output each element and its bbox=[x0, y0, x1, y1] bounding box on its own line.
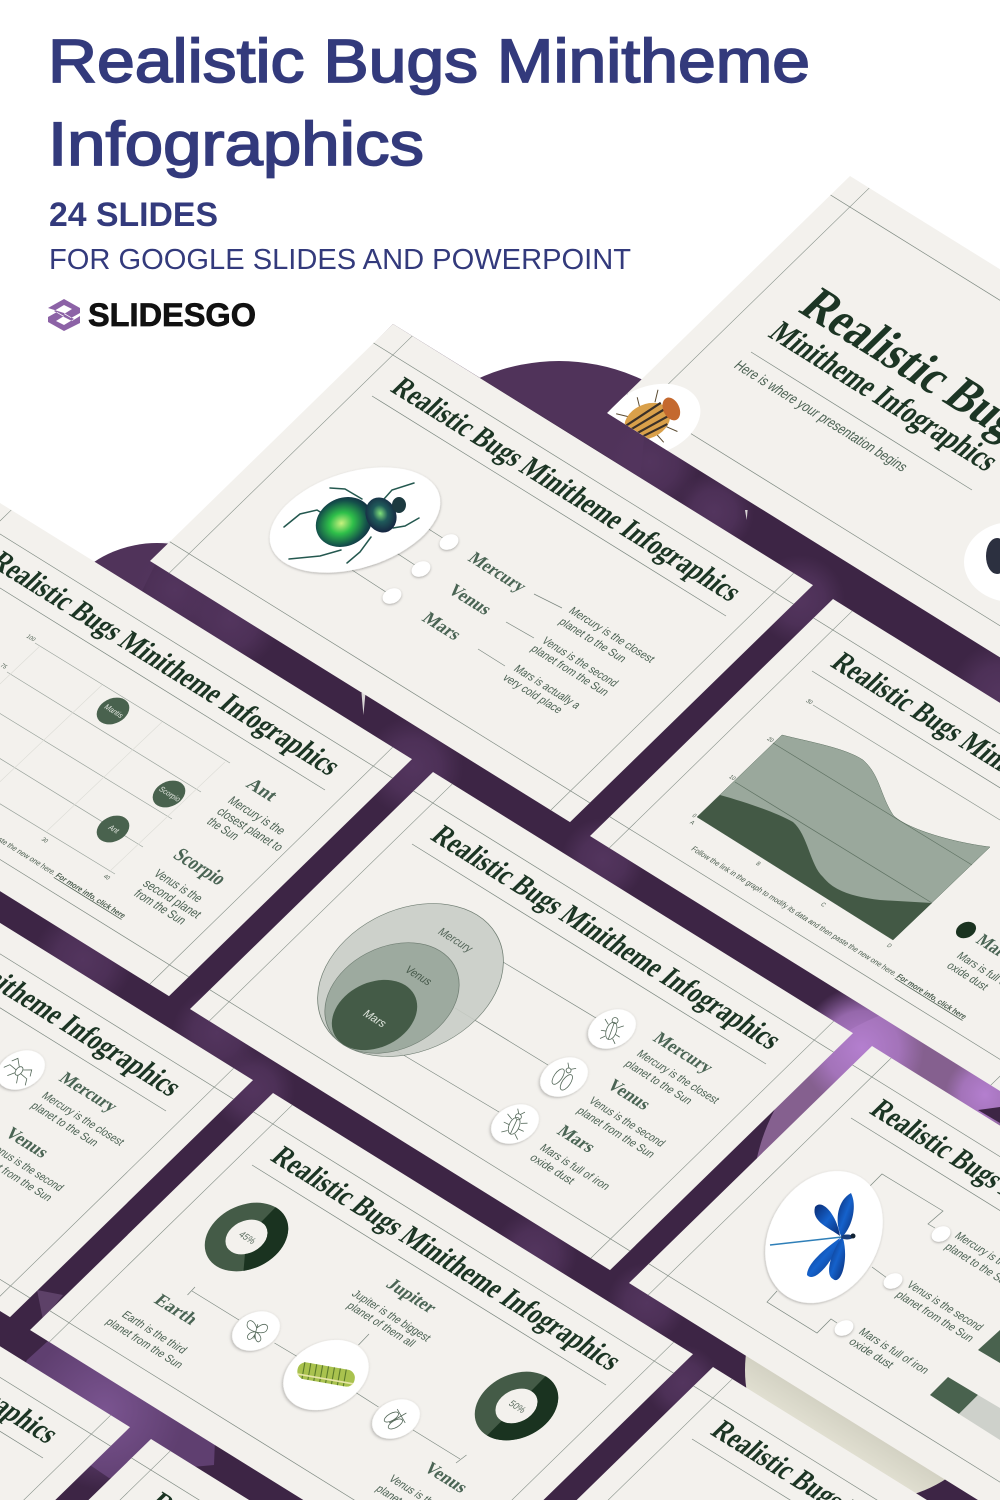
icon: cockroach bbox=[481, 1097, 549, 1151]
connector lines bbox=[188, 1287, 466, 1463]
label: Scorpio bbox=[131, 845, 231, 927]
panel: donut chart slide bbox=[30, 1093, 693, 1500]
label: Earth bbox=[103, 1291, 203, 1371]
marker: Mantis bbox=[90, 693, 136, 729]
donut chart: 50%: 50% bbox=[506, 1399, 528, 1415]
text: Venus description: planet from the Sun bbox=[893, 1289, 976, 1345]
title bbox=[48, 27, 810, 178]
title: Realistic Bugs Minitheme bbox=[48, 27, 810, 95]
title: Infographics bbox=[48, 110, 424, 178]
icon: butterfly bbox=[222, 1304, 290, 1358]
label: Venus: planet from the Sun bbox=[574, 1105, 657, 1161]
label: Mars: Mars bbox=[418, 609, 466, 644]
donut chart: 45% bbox=[202, 1201, 291, 1273]
panel: bottom-centre slide bbox=[0, 1439, 571, 1500]
label: Mars: very cold place bbox=[500, 672, 565, 716]
panel: venn slide bbox=[190, 772, 853, 1270]
label: Venus: Venus bbox=[444, 581, 497, 619]
label: Mercury: planet to the Sun bbox=[556, 616, 629, 665]
label: Mercury: Mercury is the closest bbox=[566, 605, 657, 665]
label: Jupiter: Jupiter is the biggest bbox=[349, 1288, 433, 1344]
label: Ant: Ant bbox=[242, 775, 282, 805]
label: Mars: Mars bbox=[553, 1122, 600, 1156]
slide title: Realistic Bugs Minitheme Infographics bbox=[264, 1141, 629, 1377]
chart footnote: Follow the link in the graph to modify its data and then paste the new one here. For more info, click here bbox=[689, 844, 969, 1021]
panel: bottom-left slide bbox=[0, 1166, 130, 1500]
text: Venus description: Venus is the second bbox=[904, 1279, 986, 1333]
label: Jupiter: planet of them all bbox=[344, 1300, 418, 1350]
label: Mars: Mars is actually a bbox=[511, 663, 584, 712]
label: Jupiter bbox=[344, 1275, 442, 1350]
label: Venus: Venus bbox=[1, 1124, 54, 1162]
label: Mercury: Mercury bbox=[55, 1069, 123, 1116]
subtitle: FOR GOOGLE SLIDES AND POWERPOINT bbox=[49, 244, 631, 276]
label: Earth: Earth bbox=[150, 1291, 203, 1329]
connector lines bbox=[352, 528, 562, 666]
progress bars bbox=[930, 1330, 1000, 1440]
icon: caterpillar bbox=[266, 1327, 386, 1423]
area chart: 20 bbox=[765, 736, 775, 744]
scatter chart: 100 bbox=[24, 634, 36, 643]
donut chart: 50% bbox=[472, 1370, 561, 1442]
label: Mercury bbox=[28, 1069, 127, 1149]
label: Venus bbox=[574, 1076, 668, 1161]
label: Venus bbox=[0, 1124, 66, 1204]
label: Scorpio: Scorpio bbox=[168, 845, 231, 890]
icon: fly bbox=[530, 1050, 598, 1104]
label: Scorpio: from the Sun bbox=[131, 887, 190, 927]
marker: Scorpio: Scorpio bbox=[157, 785, 183, 804]
connector lines bbox=[390, 962, 596, 1112]
panel: dragonfly slide bbox=[629, 1046, 1000, 1500]
label: Earth: Earth is the third bbox=[119, 1309, 189, 1356]
label: Venus bbox=[373, 1459, 473, 1500]
stacked venn diagram: Venus bbox=[402, 964, 435, 988]
label: Venus: Venus bbox=[603, 1076, 656, 1114]
label: Mercury: Mercury is the closest bbox=[634, 1048, 722, 1106]
label: Ant: Mercury is the bbox=[225, 794, 289, 838]
panel: lower-left icon slide bbox=[0, 819, 253, 1317]
label: Ant bbox=[204, 775, 289, 854]
small folded-corner accents bbox=[37, 510, 748, 1320]
icon: spider bbox=[0, 1043, 55, 1097]
label: Mars: Mars is full of iron bbox=[537, 1142, 613, 1193]
area chart: 0 bbox=[690, 813, 697, 819]
label: Mercury: Mercury bbox=[649, 1029, 718, 1077]
area chart: A bbox=[688, 820, 696, 827]
icon: striped potato beetle bbox=[608, 384, 700, 450]
legend: Mars bbox=[944, 919, 1000, 1000]
cream circle behind lower slides bbox=[745, 1240, 1000, 1500]
bullet dots bbox=[831, 1223, 954, 1339]
mauve band bottom left bbox=[0, 1330, 215, 1490]
marker: Scorpio bbox=[146, 776, 192, 812]
area chart bbox=[688, 698, 1000, 950]
label: Venus bbox=[444, 581, 621, 699]
label: Jupiter: Jupiter bbox=[382, 1275, 442, 1317]
panel: cover slide bbox=[593, 176, 1000, 674]
label: Mercury bbox=[622, 1029, 722, 1107]
cover tagline: Here is where your presentation begins bbox=[731, 358, 911, 474]
area chart: B bbox=[754, 861, 762, 868]
label: Mars: oxide dust bbox=[527, 1152, 577, 1187]
marker: Mantis: Mantis bbox=[102, 702, 126, 720]
stacked venn diagram: Mercury bbox=[435, 926, 476, 955]
marker: Ant bbox=[90, 811, 136, 847]
icon: dark beetle bbox=[964, 522, 1000, 602]
marker: Ant: Ant bbox=[106, 823, 122, 836]
label: Venus: Venus bbox=[420, 1459, 473, 1497]
purple backdrop behind slides bbox=[0, 324, 1000, 1500]
label: Earth: planet from the Sun bbox=[103, 1316, 186, 1371]
label: Mercury: planet to the Sun bbox=[622, 1058, 695, 1107]
scatter chart: 40 bbox=[101, 874, 111, 882]
label: Mars bbox=[527, 1122, 613, 1193]
label: Mercury: planet to the Sun bbox=[28, 1100, 101, 1149]
icon: beetle bbox=[578, 1002, 646, 1056]
area chart: C bbox=[819, 902, 827, 909]
slide title: Realistic Bugs Minitheme Infographics bbox=[424, 820, 789, 1056]
icon: blue dragonfly bbox=[741, 1149, 907, 1325]
label: Mars bbox=[418, 609, 584, 716]
text: Mars description: oxide dust bbox=[846, 1336, 896, 1371]
slide count heading: 24 SLIDES bbox=[49, 196, 218, 234]
label: Mercury bbox=[464, 549, 657, 665]
scatter chart bbox=[0, 634, 230, 882]
label: Venus: planet from the Sun bbox=[528, 643, 611, 699]
area chart: D bbox=[885, 943, 893, 950]
panel: area chart slide bbox=[590, 599, 1000, 1097]
label: Scorpio: Venus is the bbox=[151, 867, 206, 905]
icon: mosquito bbox=[362, 1392, 430, 1446]
label: Scorpio: second planet bbox=[140, 877, 205, 921]
legend: Mars: oxide dust bbox=[944, 960, 991, 993]
panel: beetle slide bbox=[150, 324, 813, 822]
connector lines bbox=[767, 1174, 943, 1333]
label: Ant: closest planet to bbox=[214, 805, 287, 854]
scatter chart: 30 bbox=[39, 837, 49, 845]
area chart: 30 bbox=[804, 698, 814, 706]
logo: Slidesgo: SLIDESGO bbox=[88, 297, 256, 333]
stacked venn diagram: Mars bbox=[360, 1008, 390, 1030]
area chart: 10 bbox=[727, 774, 737, 782]
lilac circle behind dragonfly slide bbox=[752, 986, 1000, 1402]
label: Venus: Venus is the second bbox=[586, 1095, 668, 1149]
icon: green scarab beetle bbox=[257, 448, 453, 592]
label: Venus: Venus is the second bbox=[539, 635, 621, 689]
panel: lower-right slide bbox=[470, 1367, 1000, 1500]
label: Ant: the Sun bbox=[204, 815, 243, 843]
label: Mercury: Mercury is the closest bbox=[39, 1090, 127, 1148]
panel: scatter chart slide bbox=[0, 498, 412, 996]
text: Mars description: Mars is full of iron bbox=[856, 1326, 932, 1377]
stacked venn diagram bbox=[279, 875, 542, 1085]
donut chart: 45%: 45% bbox=[236, 1230, 258, 1246]
label: Mercury: Mercury bbox=[464, 549, 532, 596]
slide title: Realistic Bugs Minitheme Infographics bbox=[384, 372, 749, 608]
bullet dots bbox=[379, 531, 462, 607]
